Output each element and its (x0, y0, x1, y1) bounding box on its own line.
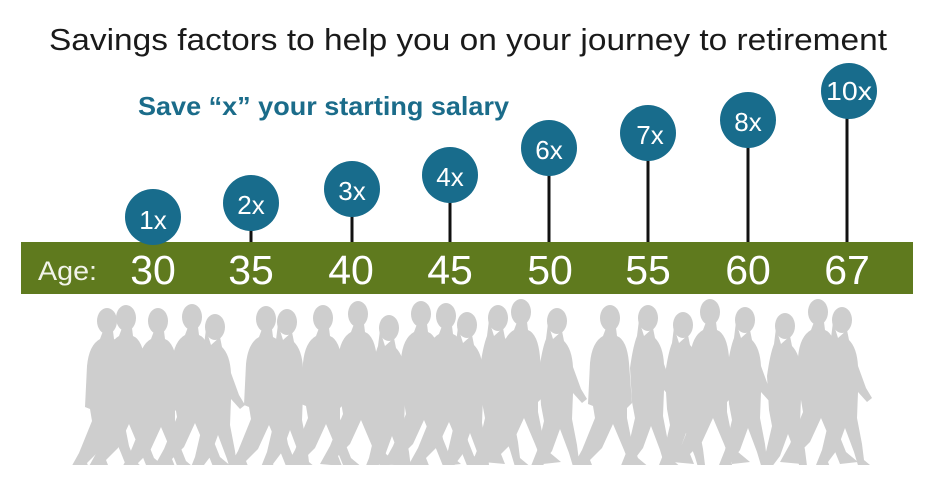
age bar (21, 242, 913, 294)
savings marker circles: 6x (535, 135, 563, 165)
age bar: 67 (824, 247, 870, 293)
stems (251, 110, 847, 242)
savings marker circles: 10x (826, 76, 872, 106)
age bar: 40 (328, 247, 374, 293)
age bar: Age: (38, 256, 97, 286)
age bar: 45 (427, 247, 473, 293)
silhouette crowd (69, 299, 876, 480)
age bar: 55 (625, 247, 671, 293)
savings marker circles: 4x (436, 162, 464, 192)
subtitle: Save “x” your starting salary (138, 91, 510, 121)
savings marker circles (125, 63, 877, 245)
savings marker circles: 7x (636, 120, 664, 150)
savings marker circles: 2x (237, 190, 265, 220)
age bar: 60 (725, 247, 771, 293)
age bar: 50 (527, 247, 573, 293)
age bar: 35 (228, 247, 274, 293)
age bar: 30 (130, 247, 176, 293)
savings marker circles: 3x (338, 176, 366, 206)
title: Savings factors to help you on your journey to retirement (49, 22, 887, 57)
savings marker circles: 8x (734, 107, 762, 137)
savings marker circles: 1x (139, 205, 167, 235)
